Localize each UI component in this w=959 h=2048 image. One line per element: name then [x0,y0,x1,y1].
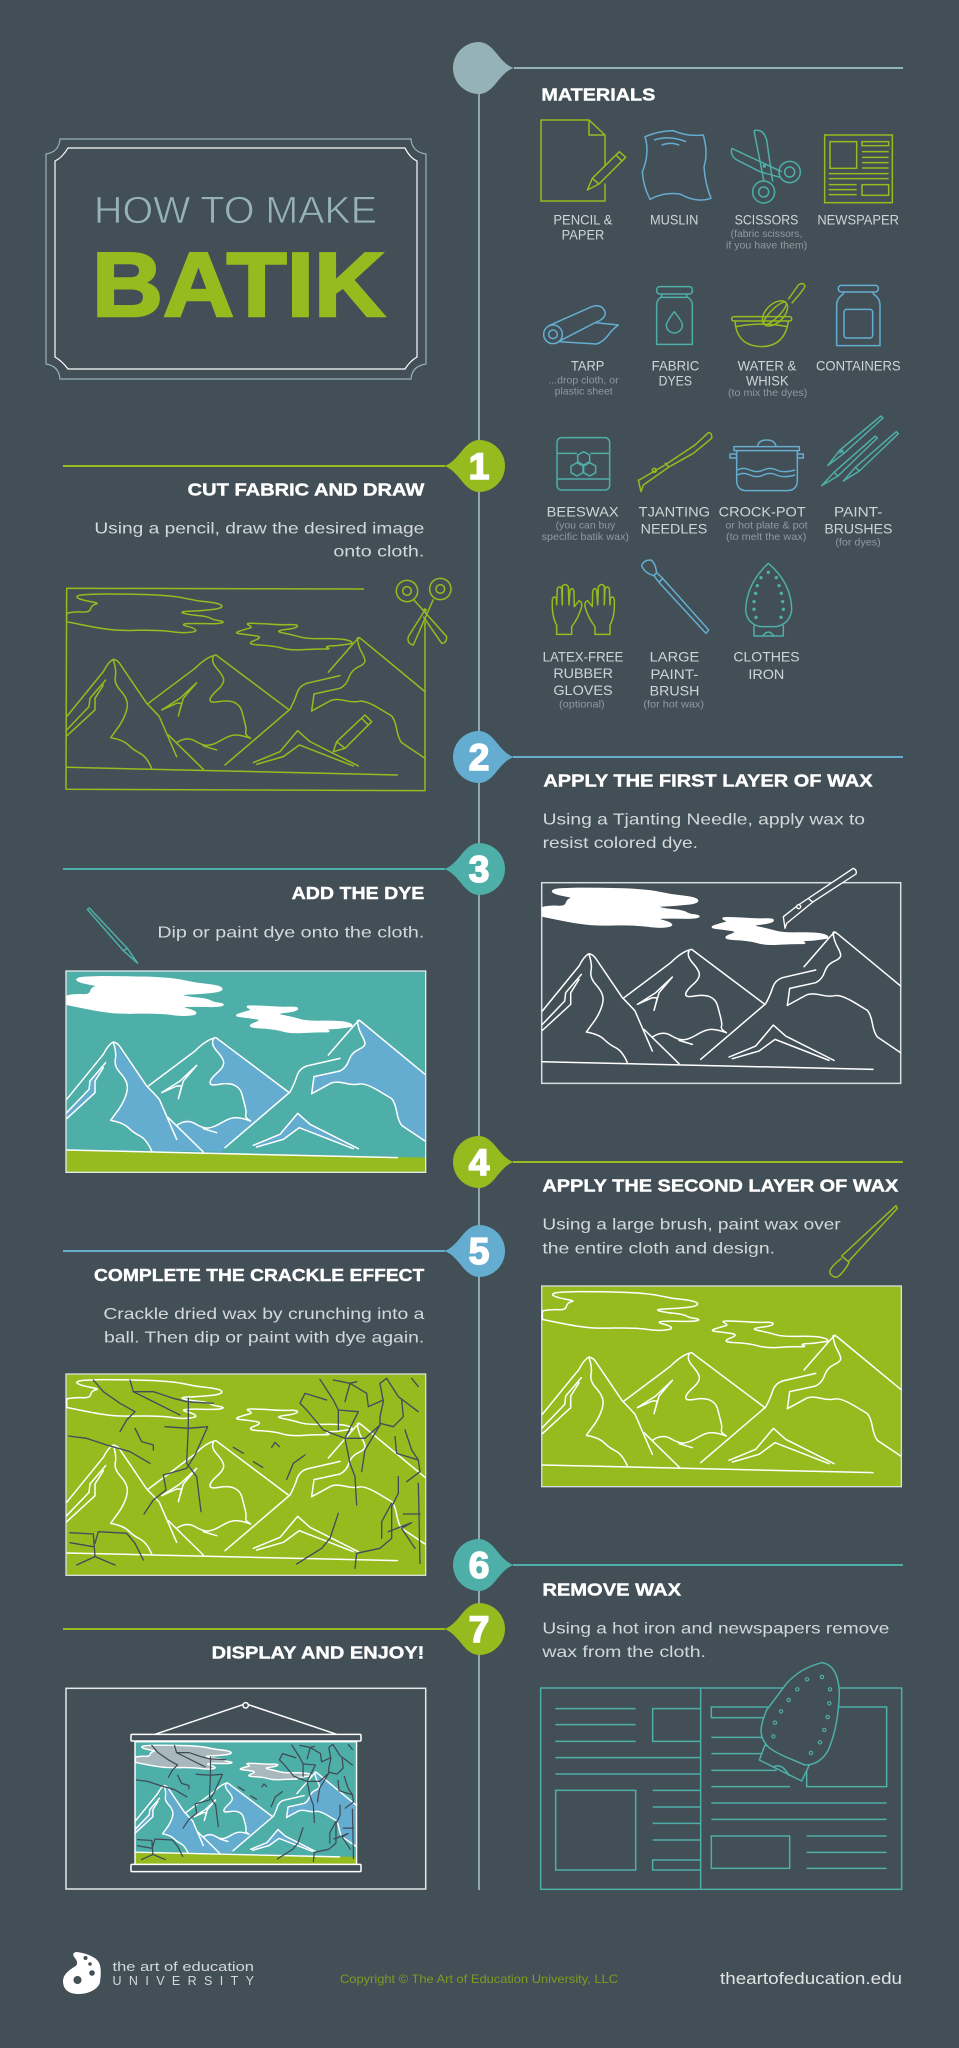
icon: tjanting needle [638,433,712,492]
palette icon [63,1952,101,1994]
labels row 1 and 2: NEWSPAPER [817,212,899,228]
step 2 drawing: wax lines [542,883,901,1083]
labels row 3 and 4: or hot plate & pot [725,521,808,532]
labels row 3 and 4: (to melt the wax) [726,532,806,543]
icon: crock-pot [730,440,803,491]
labels row 3 and 4 [542,504,892,711]
step 1 marker [63,440,505,492]
materials marker [453,42,903,94]
description: Crackle dried wax by crunching into a [103,1306,424,1323]
icon: paint brush on step 3 [87,908,138,963]
step 4 text: the entire cloth and design. [542,1240,775,1257]
icon: muslin [642,131,711,200]
footer logo [63,1952,255,1994]
labels row 3 and 4: (you can buy [556,521,616,532]
heading: REMOVE WAX [542,1579,681,1599]
heading: COMPLETE THE CRACKLE EFFECT [94,1265,424,1285]
materials heading: MATERIALS [541,84,655,104]
materials row 1 and 2 [541,84,901,399]
labels row 3 and 4: CROCK-POT [719,504,806,520]
labels row 3 and 4: IRON [748,666,784,682]
heading: CUT FABRIC AND DRAW [188,480,424,500]
step 4 marker [453,1136,903,1188]
step 4 text [542,1175,898,1257]
labels row 1 and 2: WATER & [738,357,797,373]
labels row 3 and 4: NEEDLES [641,521,707,537]
description: Using a hot iron and newspapers remove [542,1621,889,1638]
copyright: Copyright © The Art of Education University, LLC [340,1972,618,1986]
icon: paint brushes [822,416,898,486]
step 1 drawing: pencil sketch [66,588,425,791]
labels row 1 and 2: MUSLIN [650,212,698,228]
icon: scissors on step 1 [396,578,451,645]
icon: beeswax [557,438,610,490]
labels row 3 and 4: BEESWAX [547,504,619,520]
labels row 3 and 4: (for hot wax) [643,700,704,711]
step 3 marker [63,843,505,895]
step 5 text: ball. Then dip or paint with dye again. [104,1329,424,1346]
timeline spine [478,90,480,1890]
labels row 1 and 2: ...drop cloth, or [548,375,619,386]
step 7 heading: DISPLAY AND ENJOY! [212,1643,424,1663]
heading: APPLY THE SECOND LAYER OF WAX [542,1175,898,1195]
poster artwork [135,1742,357,1866]
labels row 1 and 2: PAPER [562,227,604,243]
step 6 text [541,1579,889,1661]
labels row 3 and 4: LARGE [650,649,699,665]
icon: pencil and paper [541,120,626,201]
labels row 3 and 4: CLOTHES [733,649,800,665]
labels row 1 and 2: PENCIL & [553,212,613,228]
icon: containers [837,285,880,346]
website: theartofeducation.edu [720,1969,902,1988]
labels row 3 and 4: (optional) [559,700,605,711]
step 1 marker: 1 [469,446,489,487]
description: Using a large brush, paint wax over [542,1216,841,1233]
hanging batik poster [131,1703,361,1872]
icon: large brush on step 4 [830,1206,897,1277]
labels row 1 and 2: DYES [659,372,692,388]
labels row 3 and 4: (for dyes) [835,537,881,548]
logo text: the art of education [112,1959,254,1974]
step 2 text: resist colored dye. [543,835,698,852]
step 7 marker: 7 [469,1609,489,1650]
title frame [46,139,426,379]
step 1 text [94,480,424,561]
description: Using a pencil, draw the desired image [94,520,424,537]
step 6 drawing: newspaper and iron [541,1663,902,1889]
heading: APPLY THE FIRST LAYER OF WAX [543,771,873,791]
description: Using a Tjanting Needle, apply wax to [543,812,865,829]
icon: tarp [544,306,618,344]
labels row 3 and 4: BRUSHES [824,521,892,537]
description: Dip or paint dye onto the cloth. [157,924,424,941]
labels row 1 and 2 [548,212,901,399]
newspaper spread [541,1688,902,1889]
materials row 3 and 4 [542,416,898,711]
step 3 text [157,883,424,941]
heading: ADD THE DYE [292,883,424,903]
labels row 3 and 4: BRUSH [650,683,699,699]
labels row 3 and 4: TJANTING [639,504,710,520]
iron [759,1663,839,1781]
icon: large paint brush [642,560,709,633]
labels row 3 and 4: GLOVES [553,682,613,698]
labels row 1 and 2: plastic sheet [555,386,613,397]
icon: rubber gloves [552,584,614,634]
labels row 1 and 2: (fabric scissors, [731,229,802,240]
labels row 1 and 2: CONTAINERS [816,357,901,373]
step 4 drawing: waxed cloth [542,1286,901,1487]
icon: scissors [731,130,800,203]
icon: tjanting needle on step 2 [783,868,856,928]
step 6 marker: 6 [469,1545,489,1586]
icon: fabric dyes [657,287,692,344]
step 5 marker [63,1225,505,1277]
title: how to make: HOW TO MAKE [94,190,377,232]
labels row 1 and 2: TARP [571,357,604,373]
step 3 marker: 3 [469,849,489,890]
step 6 text: wax from the cloth. [541,1644,706,1661]
icon: pencil on step 1 [333,715,372,752]
labels row 1 and 2: (to mix the dyes) [728,388,807,399]
labels row 1 and 2: SCISSORS [735,212,798,228]
step 6 marker [453,1539,903,1591]
labels row 1 and 2: WHISK [746,372,789,388]
step 2 text [543,771,873,852]
labels row 3 and 4: LATEX-FREE [543,649,623,665]
step 4 marker: 4 [469,1142,490,1183]
footer logo: UNIVERSITY [112,1974,255,1988]
labels row 3 and 4: RUBBER [553,665,613,681]
step 7 marker [63,1603,505,1655]
step 1 text: onto cloth. [333,544,424,561]
labels row 3 and 4: specific batik wax) [542,532,629,543]
step 2 marker: 2 [469,737,489,778]
labels row 3 and 4: PAINT- [650,666,699,682]
labels row 1 and 2: FABRIC [652,357,699,373]
step 3 drawing: dyed cloth [66,971,426,1172]
step 5 marker: 5 [469,1231,489,1272]
step 7 frame [66,1688,426,1889]
icon: newspaper [825,135,892,203]
labels row 1 and 2: if you have them) [726,240,807,251]
step 2 marker [453,731,903,783]
title: batik: BATIK [92,235,385,336]
step 5 drawing: crackled cloth [66,1374,426,1575]
step 5 text [94,1265,424,1346]
hanging string and rollers [131,1703,361,1872]
icon: clothes iron [746,563,792,636]
icon: water and whisk [732,284,805,347]
labels row 3 and 4: PAINT- [834,504,883,520]
